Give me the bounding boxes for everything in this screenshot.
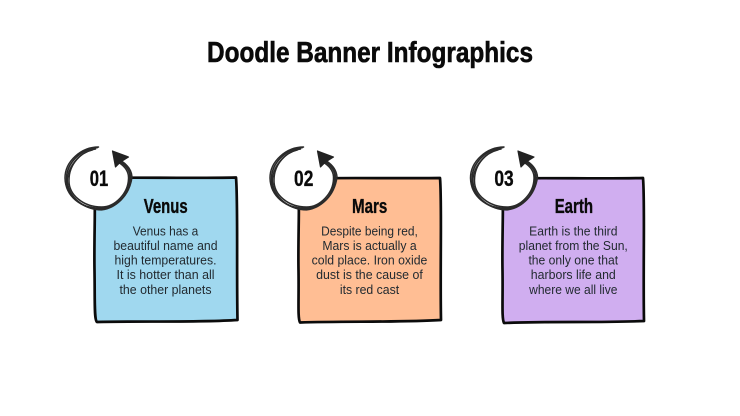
number 02: 02 (294, 166, 313, 191)
card background: Venus (94, 178, 238, 322)
title: Doodle Banner Infographics (207, 37, 533, 69)
text: Mars description: cold place. Iron oxide (312, 253, 427, 268)
text: Mars description: Despite being red, (321, 224, 418, 238)
heading: Mars: Mars (352, 196, 387, 218)
text: Earth description: planet from the Sun, (519, 238, 628, 253)
number 03: 03 (494, 166, 514, 191)
card background: Earth (502, 178, 644, 323)
text: Venus description: beautiful name and (114, 238, 218, 253)
text: Venus description: Venus has a (133, 224, 199, 238)
heading: Earth: Earth (555, 196, 593, 218)
text: Earth description: Earth is the third (529, 224, 617, 238)
text: Venus description: the other planets (120, 282, 212, 297)
text: Venus description (114, 224, 218, 297)
text: Earth description (519, 224, 628, 297)
heading: Venus: Venus (144, 196, 188, 218)
text: Earth description: harbors life and (531, 267, 616, 282)
panel: Earth (470, 147, 644, 323)
text: Earth description: the only one that (528, 253, 619, 268)
card background: Mars (298, 178, 441, 322)
icon: circular arrow 01 (65, 147, 132, 210)
panel: Mars (270, 147, 441, 322)
text: Mars description: dust is the cause of (316, 267, 423, 282)
text: Earth description: where we all live (528, 282, 617, 297)
icon: circular arrow 03 (470, 147, 538, 210)
text: Venus description: It is hotter than all (116, 267, 215, 282)
text: Mars description (312, 224, 427, 297)
panel: Venus (65, 147, 238, 322)
text: Venus description: high temperatures. (114, 253, 216, 268)
icon: circular arrow 02 (270, 147, 337, 210)
text: Mars description: its red cast (340, 282, 400, 297)
text: Mars description: Mars is actually a (322, 238, 417, 253)
number 01: 01 (90, 166, 108, 191)
